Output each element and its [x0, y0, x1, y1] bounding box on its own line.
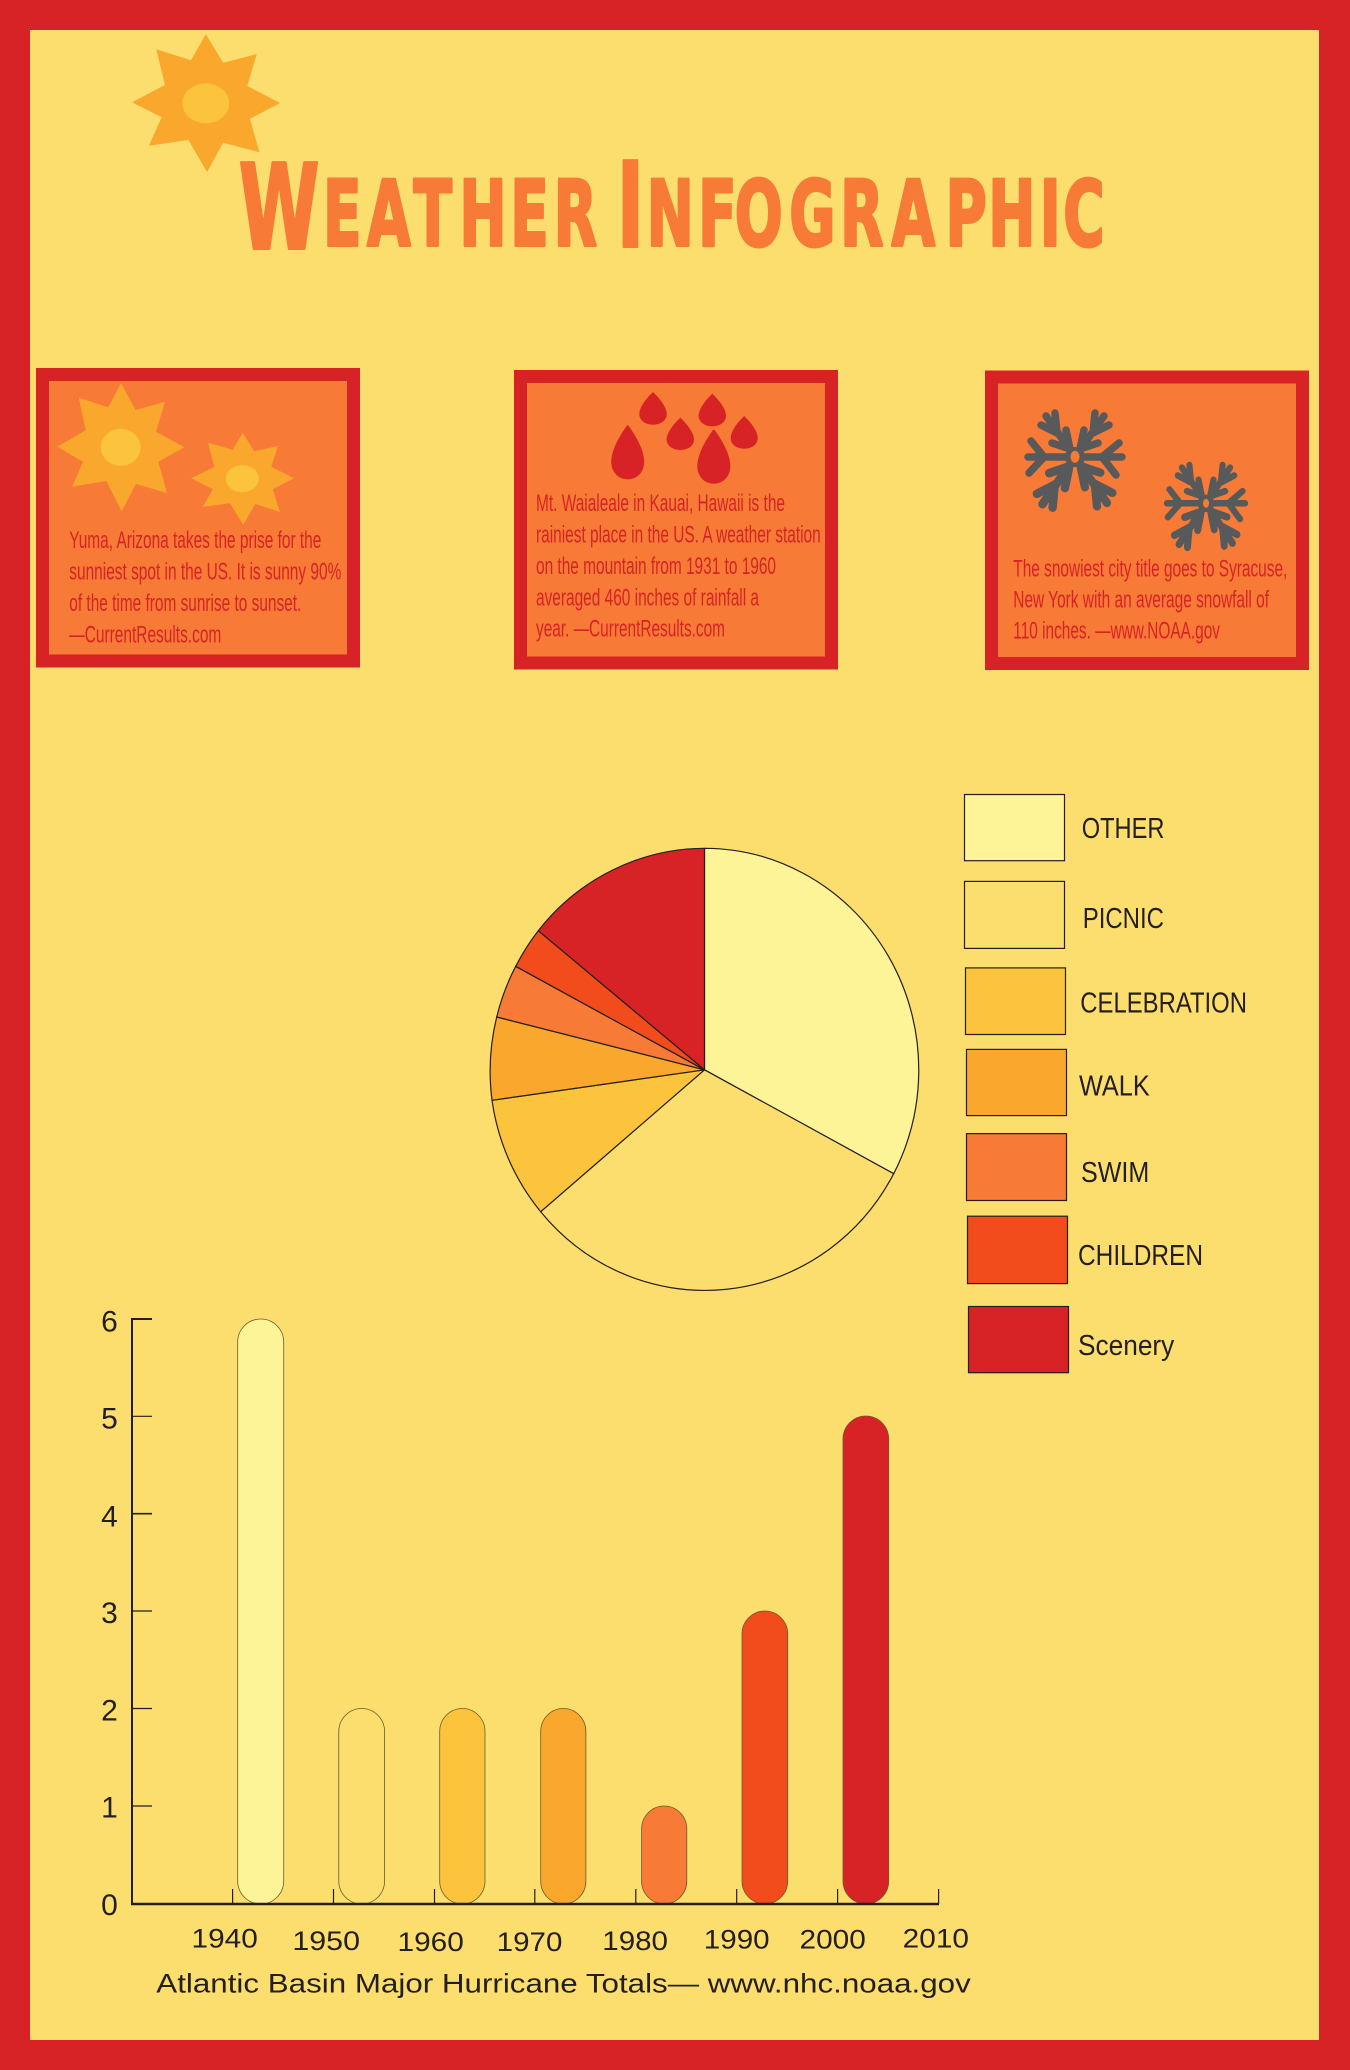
legend item: children	[968, 1216, 1203, 1284]
y axis labels: 5	[101, 1402, 118, 1435]
bars	[238, 1319, 889, 1904]
y axis labels: 3	[101, 1597, 118, 1630]
axes and ticks	[131, 1318, 939, 1904]
y axis labels: 4	[101, 1501, 118, 1534]
icon: title sun	[132, 34, 280, 172]
title: NFOGRAPHIC	[647, 161, 1105, 267]
slice: swim	[497, 966, 704, 1070]
icon: large sun	[57, 383, 184, 511]
text: rainiest fact: rainiest place in the US. A weather station	[536, 522, 821, 549]
x axis labels: 2010	[903, 1924, 969, 1954]
x axis labels: 1970	[497, 1927, 562, 1957]
text: rainiest fact: Mt. Waialeale in Kauai, Hawaii is the	[536, 490, 785, 517]
title: I	[617, 138, 644, 275]
legend item: walk: WALK	[1079, 1071, 1150, 1103]
icon: small snowflake	[1167, 465, 1245, 547]
text: sunniest fact: of the time from sunrise to sunset.	[69, 590, 301, 617]
legend item: scenery: Scenery	[1078, 1330, 1175, 1362]
slice: scenery	[538, 848, 704, 1070]
icon: large snowflake	[1028, 413, 1122, 508]
x axis labels: 1950	[292, 1926, 360, 1956]
slice: walk	[490, 1017, 704, 1100]
text: rainiest fact	[536, 490, 821, 643]
panel: sunniest	[42, 374, 354, 661]
slice: children	[516, 931, 704, 1070]
legend item: children: CHILDREN	[1078, 1240, 1203, 1272]
legend item: other	[964, 794, 1164, 861]
y axis labels: 0	[101, 1889, 118, 1922]
legend item: picnic: PICNIC	[1083, 903, 1164, 935]
text: sunniest fact: sunniest spot in the US. It is sunny 90%	[69, 558, 341, 585]
legend item: walk	[966, 1049, 1150, 1116]
x axis labels: 1980	[602, 1926, 668, 1956]
x axis labels: 1940	[192, 1924, 258, 1954]
bar: 1970s	[541, 1708, 586, 1904]
text: sunniest fact: Yuma, Arizona takes the prise for the	[69, 527, 321, 554]
icon: rain drops	[611, 392, 758, 484]
bar chart: hurricanes	[101, 1306, 971, 1999]
card frame	[520, 376, 832, 663]
y axis labels: 1	[101, 1792, 118, 1825]
legend item: swim	[966, 1134, 1149, 1200]
text: snowiest fact: 110 inches. —www.NOAA.gov	[1013, 618, 1220, 645]
bar: 1940s	[238, 1319, 284, 1904]
bar: 1950s	[339, 1708, 385, 1904]
legend item: other: OTHER	[1082, 813, 1164, 845]
slice: picnic	[541, 1070, 894, 1290]
x axis labels: 1990	[704, 1925, 770, 1955]
x axis labels: 2000	[800, 1925, 866, 1955]
card frame	[992, 377, 1302, 664]
text: snowiest fact	[1013, 556, 1287, 645]
bar: 2000s	[843, 1416, 889, 1904]
text: rainiest fact: year. —CurrentResults.com	[536, 616, 725, 643]
x axis labels: 1960	[398, 1927, 464, 1957]
legend item: celebration	[966, 968, 1247, 1034]
x axis labels	[192, 1924, 969, 1957]
bar: 1980s	[642, 1806, 687, 1904]
legend item: celebration: CELEBRATION	[1080, 988, 1247, 1020]
icon: small sun	[191, 433, 294, 525]
y axis labels: 6	[101, 1306, 118, 1339]
legend item: picnic	[964, 881, 1164, 948]
text: sunniest fact	[69, 527, 341, 648]
panel: snowiest	[992, 377, 1302, 664]
title: EATHER	[323, 161, 597, 267]
text: sunniest fact: —CurrentResults.com	[69, 621, 221, 648]
slice: celebration	[492, 1070, 704, 1212]
legend item: swim: SWIM	[1081, 1157, 1149, 1189]
legend	[964, 794, 1247, 1373]
panel: rainiest	[520, 376, 832, 663]
bar: 1990s	[742, 1611, 788, 1904]
y axis labels	[101, 1306, 118, 1922]
title: W	[239, 140, 319, 277]
chart caption: Atlantic Basin Major Hurricane Totals— www.nhc.noaa.gov	[156, 1969, 971, 1999]
y axis labels: 2	[101, 1694, 118, 1728]
slice: other	[704, 848, 919, 1174]
text: rainiest fact: on the mountain from 1931 to 1960	[536, 553, 776, 580]
pie chart	[490, 848, 919, 1290]
legend item: scenery	[968, 1306, 1175, 1373]
text: rainiest fact: averaged 460 inches of rainfall a	[536, 584, 759, 611]
bar: 1960s	[440, 1708, 485, 1904]
card frame	[42, 374, 354, 661]
